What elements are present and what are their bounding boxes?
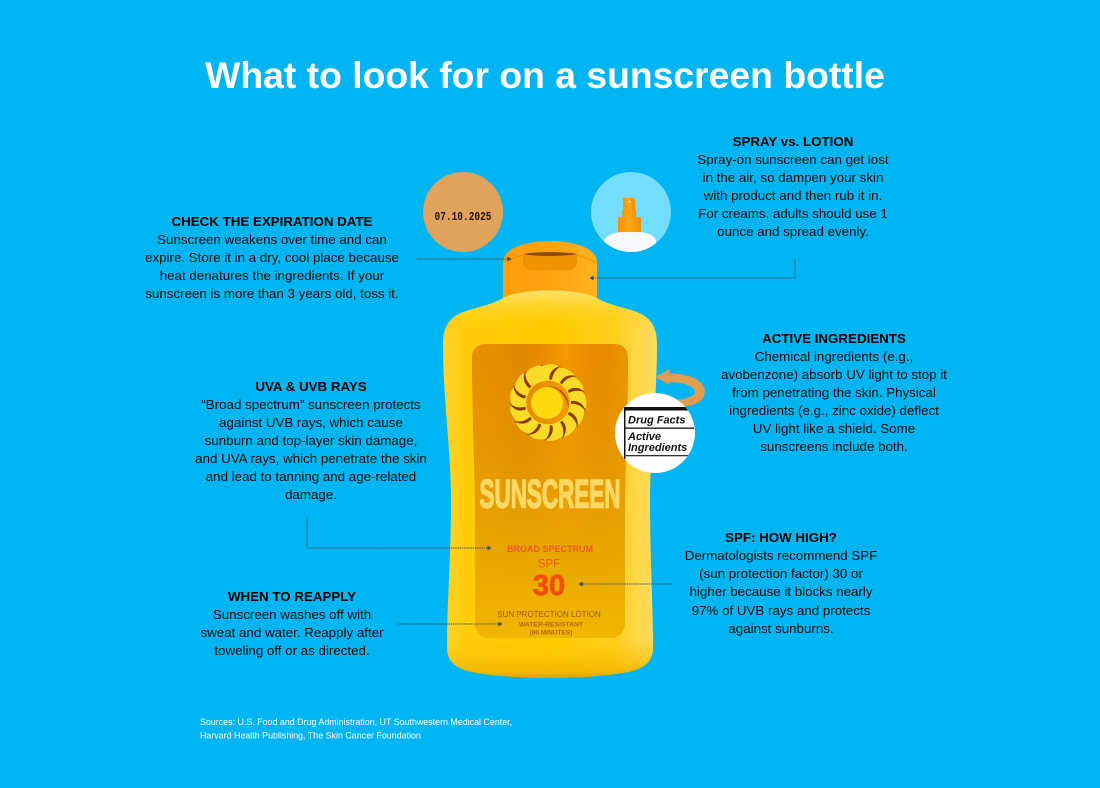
text block: active ingredients: UV light like a shield. Some (753, 421, 915, 436)
text block: spf how high: Dermatologists recommend SPF (685, 548, 877, 563)
bottle label text: SUN PROTECTION LOTION (497, 610, 601, 619)
text block: spf how high: SPF: HOW HIGH? (725, 530, 837, 545)
sources (200, 717, 512, 740)
text block: when to reapply: toweling off or as directed. (214, 643, 370, 658)
bottle label text (480, 472, 620, 636)
text block: check the expiration date: heat denatures the ingredients. If your (160, 268, 385, 283)
sunscreen bottle (443, 241, 657, 678)
text block: when to reapply: Sunscreen washes off with (213, 607, 371, 622)
text block: spray vs lotion (697, 134, 889, 239)
icon: drug facts circle with curved arrow: Active (627, 431, 661, 443)
text block: active ingredients: Chemical ingredients (e.g., (755, 349, 913, 364)
text block: active ingredients: from penetrating the skin. Physical (732, 385, 936, 400)
text block: active ingredients: ingredients (e.g., zinc oxide) deflect (729, 403, 939, 418)
icon: expiration date circle (423, 172, 503, 252)
text block: spf how high: against sunburns. (728, 621, 834, 636)
icon: drug facts circle with curved arrow: Ingredients (628, 442, 687, 454)
text block: when to reapply (200, 589, 384, 658)
text block: uva and uvb rays: sunburn and top-layer skin damage, (205, 433, 417, 448)
text block: uva and uvb rays: against UVB rays, which cause (219, 415, 403, 430)
bottle label text: (80 MINUTES) (530, 630, 572, 636)
text block: uva and uvb rays (195, 379, 427, 502)
text block: spf how high: 97% of UVB rays and protects (692, 603, 871, 618)
arrow: uva uvb (307, 518, 492, 550)
text block: spf how high: (sun protection factor) 30 or (699, 566, 863, 581)
text block: spf how high: higher because it blocks nearly (690, 584, 873, 599)
bottle body (443, 290, 657, 678)
text block: spray vs lotion: with product and then rub it in. (703, 188, 882, 203)
bottle label text: BROAD SPECTRUM (507, 544, 593, 554)
text block: uva and uvb rays: damage. (285, 487, 337, 502)
text block: active ingredients (721, 331, 947, 454)
text block: spf how high (685, 530, 877, 636)
text block: spray vs lotion: Spray-on sunscreen can get lost (697, 152, 889, 167)
text block: active ingredients: ACTIVE INGREDIENTS (762, 331, 906, 346)
bottle label panel (472, 344, 628, 638)
text block: spray vs lotion: in the air, so dampen your skin (703, 170, 883, 185)
arrow: expiration date (417, 256, 512, 262)
text block: check the expiration date: sunscreen is more than 3 years old, toss it. (145, 286, 399, 301)
text block: when to reapply: WHEN TO REAPPLY (228, 589, 356, 604)
title: What to look for on a sunscreen bottle (205, 54, 885, 96)
sources: Sources: U.S. Food and Drug Administration, UT Southwestern Medical Center, (200, 717, 512, 727)
text block: check the expiration date (145, 214, 399, 301)
text block: when to reapply: sweat and water. Reapply after (200, 625, 384, 640)
bottle cap (503, 241, 597, 300)
bottle label text: 30 (533, 570, 565, 602)
arrow: spf (578, 582, 672, 586)
bottle label text: SUNSCREEN (480, 472, 620, 516)
text block: uva and uvb rays: and lead to tanning and age-related (206, 469, 416, 484)
text block: active ingredients: avobenzone) absorb UV light to stop it (721, 367, 947, 382)
text block: check the expiration date: Sunscreen weakens over time and can (157, 232, 387, 247)
icon: drug facts circle with curved arrow (615, 369, 705, 473)
bottle label text: WATER-RESISTANT (519, 622, 584, 628)
arrow: curved orange (655, 369, 705, 407)
icon: expiration date circle: 07.10.2025 (434, 211, 492, 224)
text block: uva and uvb rays: and UVA rays, which penetrate the skin (195, 451, 427, 466)
icon: drug facts circle with curved arrow: Drug Facts (628, 414, 685, 426)
icon: spray nozzle circle (591, 172, 671, 256)
sources: Harvard Health Publishing, The Skin Cancer Foundation (200, 730, 421, 740)
text block: spray vs lotion: For creams, adults should use 1 (698, 206, 888, 221)
arrow: spray vs lotion (590, 259, 795, 280)
text block: spray vs lotion: SPRAY vs. LOTION (733, 134, 853, 149)
text block: active ingredients: sunscreens include both. (760, 439, 908, 454)
text block: uva and uvb rays: “Broad spectrum” sunscreen protects (201, 397, 421, 412)
text block: check the expiration date: expire. Store it in a dry, cool place because (145, 250, 399, 265)
arrow: when to reapply (398, 622, 502, 626)
bottle label text: SPF (538, 558, 560, 570)
text block: uva and uvb rays: UVA & UVB RAYS (255, 379, 367, 394)
text block: check the expiration date: CHECK THE EXPIRATION DATE (172, 214, 373, 229)
icon: sun logo (508, 363, 588, 443)
text block: spray vs lotion: ounce and spread evenly. (717, 224, 869, 239)
